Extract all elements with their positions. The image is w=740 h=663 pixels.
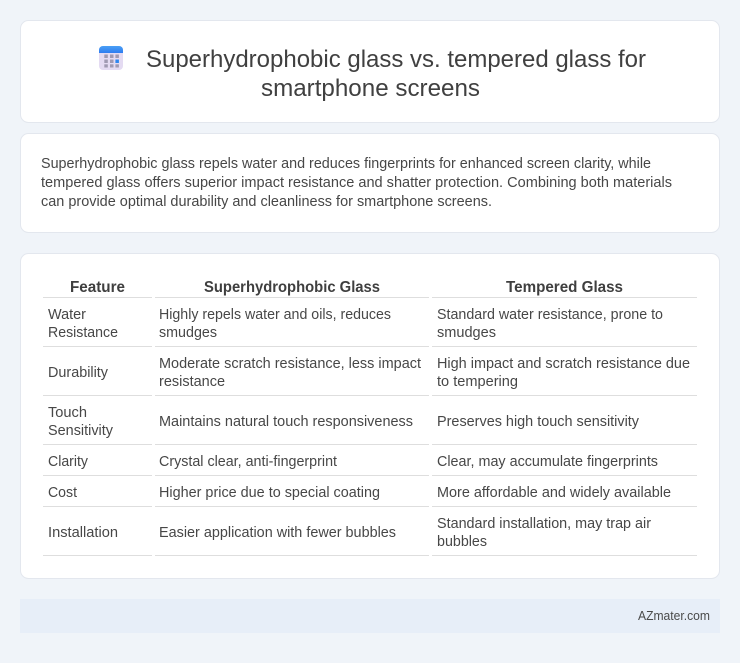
row: installation: Easier application with fewer bubbles bbox=[159, 525, 396, 541]
row: durability: Moderate scratch resistance, less impact bbox=[159, 356, 421, 372]
heading: Superhydrophobic glass vs. tempered glass for bbox=[146, 46, 646, 73]
row: water resistance: Resistance bbox=[48, 325, 118, 341]
row: touch sensitivity: Maintains natural touch responsiveness bbox=[159, 414, 413, 430]
row: touch sensitivity bbox=[48, 405, 640, 439]
row: installation: Installation bbox=[48, 525, 118, 541]
text block: summary: tempered glass offers superior impact resistance and shatter protection. Combining both materials bbox=[41, 175, 672, 191]
row: water resistance: Standard water resistance, prone to bbox=[437, 307, 663, 323]
table header: Superhydrophobic Glass bbox=[204, 279, 380, 296]
text block: summary: can provide optimal durability and cleanliness for smartphone screens. bbox=[41, 194, 492, 210]
row: water resistance: smudges bbox=[159, 325, 217, 341]
row: cost: More affordable and widely available bbox=[437, 485, 671, 501]
row: water resistance: smudges bbox=[437, 325, 496, 341]
panel: title bbox=[20, 20, 720, 122]
footer bbox=[20, 599, 720, 633]
row: water resistance: Highly repels water and oils, reduces bbox=[159, 307, 391, 323]
row: touch sensitivity: Touch bbox=[48, 405, 87, 421]
table header: Feature bbox=[70, 279, 125, 296]
table header bbox=[70, 279, 623, 296]
row: touch sensitivity: Sensitivity bbox=[48, 423, 114, 439]
row: cost bbox=[48, 485, 671, 501]
table header: Tempered Glass bbox=[506, 279, 623, 296]
row: cost: Cost bbox=[48, 485, 77, 501]
row: clarity bbox=[48, 454, 658, 470]
row: clarity: Clarity bbox=[48, 454, 89, 470]
row: durability: resistance bbox=[159, 374, 225, 390]
heading bbox=[146, 46, 646, 102]
panel: comparison table bbox=[20, 254, 720, 578]
row: durability: Durability bbox=[48, 365, 109, 381]
row: durability: to tempering bbox=[437, 374, 518, 390]
row: clarity: Crystal clear, anti-fingerprint bbox=[159, 454, 337, 470]
heading: smartphone screens bbox=[261, 75, 480, 102]
icon: calendar bbox=[99, 46, 123, 70]
row: installation: bubbles bbox=[437, 534, 487, 550]
row: durability: High impact and scratch resistance due bbox=[437, 356, 690, 372]
footer: AZmater.com bbox=[638, 609, 710, 623]
row: clarity: Clear, may accumulate fingerprints bbox=[437, 454, 658, 470]
row: installation bbox=[48, 516, 651, 550]
text block: summary bbox=[41, 156, 672, 210]
row: durability bbox=[48, 356, 690, 390]
row: water resistance bbox=[48, 307, 663, 341]
text block: summary: Superhydrophobic glass repels water and reduces fingerprints for enhanced screen clarity, while bbox=[41, 156, 651, 172]
row: cost: Higher price due to special coating bbox=[159, 485, 380, 501]
row: installation: Standard installation, may trap air bbox=[437, 516, 651, 532]
row: water resistance: Water bbox=[48, 307, 86, 323]
panel: introduction bbox=[20, 134, 720, 232]
row: touch sensitivity: Preserves high touch sensitivity bbox=[437, 414, 640, 430]
